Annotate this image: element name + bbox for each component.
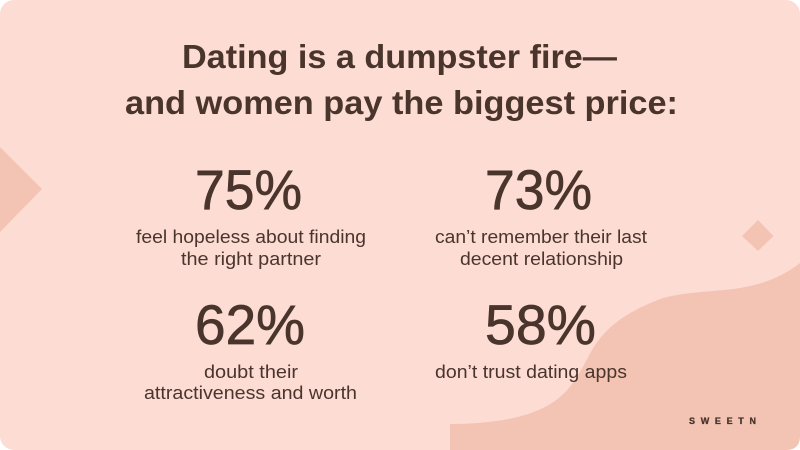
stat: 73%: decent relationship	[460, 248, 623, 269]
wave shape: bottom right	[450, 263, 800, 450]
title	[125, 38, 678, 121]
stat: 62%: attractiveness and worth	[144, 382, 357, 403]
stat: 75%: feel hopeless about finding	[136, 226, 366, 247]
stat: 75%: 75%	[195, 158, 302, 221]
stat: 58%	[435, 293, 627, 382]
title: and women pay the biggest price:	[125, 84, 678, 121]
logo: SWEETN: SWEETN	[689, 416, 756, 426]
stat: 58%: 58%	[485, 293, 596, 356]
stat: 75%	[136, 158, 366, 269]
icon: left triangle	[0, 147, 42, 232]
stat: 58%: don’t trust dating apps	[435, 361, 627, 382]
stat: 62%: doubt their	[204, 361, 298, 382]
stat: 73%: can’t remember their last	[435, 226, 647, 247]
icon: small diamond	[742, 220, 774, 251]
stat: 73%	[435, 158, 647, 269]
title: Dating is a dumpster fire—	[182, 38, 617, 75]
stat: 62%	[144, 293, 357, 403]
stat: 62%: 62%	[195, 293, 305, 356]
stat: 73%: 73%	[485, 158, 592, 221]
stat: 75%: the right partner	[181, 248, 321, 269]
